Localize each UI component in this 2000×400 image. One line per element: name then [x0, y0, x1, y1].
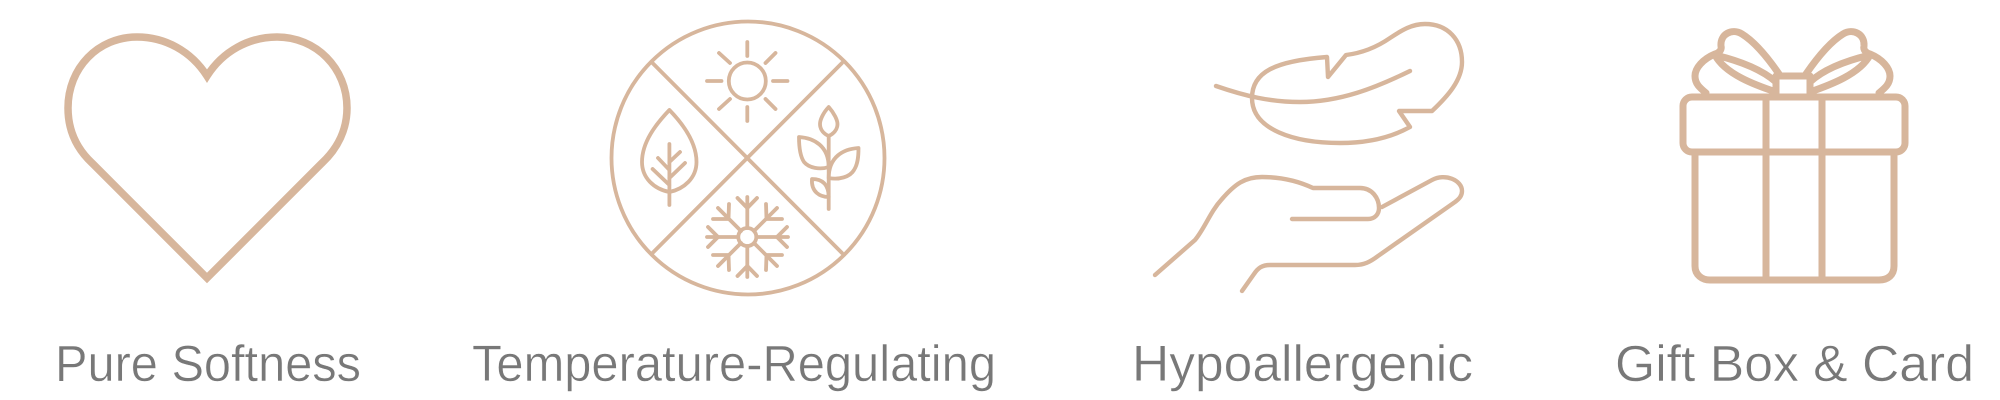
icon: gift box	[1683, 32, 1905, 280]
icon: feather	[1216, 24, 1462, 143]
panel: hypoallergenic	[1132, 24, 1473, 392]
panel: pure softness	[55, 37, 361, 392]
icon: snowflake	[707, 197, 788, 277]
label: temperature-regulating: Temperature-Regulating	[472, 335, 996, 392]
icon: open hand	[1155, 177, 1462, 291]
icon: seasons circle	[612, 22, 884, 294]
icon: leaf	[642, 110, 696, 205]
label: gift box and card: Gift Box & Card	[1615, 335, 1974, 392]
icon: heart	[68, 37, 347, 278]
label: hypoallergenic: Hypoallergenic	[1132, 335, 1473, 392]
label: pure softness: Pure Softness	[55, 335, 361, 392]
icon: plant sprig	[799, 107, 858, 209]
panel: temperature-regulating	[472, 22, 996, 392]
icon: sun	[707, 42, 788, 121]
panel: gift box and card	[1615, 32, 1974, 392]
